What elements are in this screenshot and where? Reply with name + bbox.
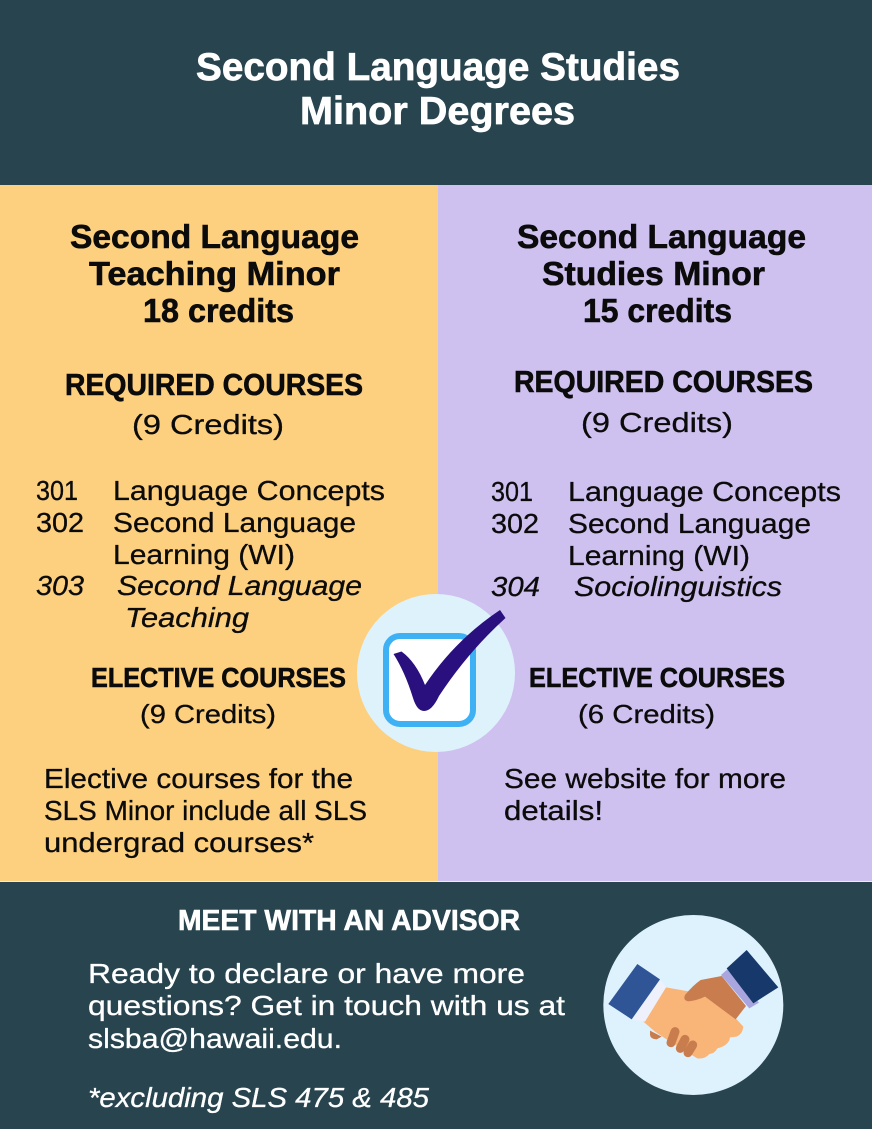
required courses heading: REQUIRED COURSES [65, 367, 363, 402]
elective courses note: details! [504, 795, 603, 826]
required courses heading [65, 367, 363, 440]
required course list: Language Concepts [113, 475, 385, 506]
required course list: 302 [491, 508, 539, 539]
required course list [36, 475, 385, 633]
required courses heading [514, 364, 813, 438]
title: Minor Degrees [300, 90, 575, 133]
required course list: 303 [36, 570, 84, 601]
required courses heading: (9 Credits) [581, 407, 733, 438]
elective courses heading [91, 662, 346, 729]
required courses heading: REQUIRED COURSES [514, 364, 813, 399]
advisor text [88, 958, 565, 1054]
advisor heading: MEET WITH AN ADVISOR [178, 905, 520, 937]
elective courses heading: (9 Credits) [140, 699, 276, 729]
required course list: Language Concepts [568, 476, 841, 507]
advisor text: Ready to declare or have more [88, 958, 525, 989]
footnote: *excluding SLS 475 & 485 [88, 1082, 429, 1113]
heading: studies minor [517, 218, 806, 329]
required course list: Teaching [125, 602, 249, 633]
elective courses note [44, 763, 367, 858]
heading: studies minor: 15 credits [583, 292, 732, 329]
required course list [491, 476, 841, 602]
elective courses heading [529, 662, 785, 729]
required course list: 302 [36, 507, 84, 538]
title [196, 46, 680, 133]
heading: studies minor: Second Language [517, 218, 806, 255]
advisor text: slsba@hawaii.edu. [88, 1023, 342, 1054]
header band [0, 0, 872, 185]
panel: Second Language Teaching Minor [0, 185, 438, 881]
required course list: Second Language [117, 570, 362, 601]
elective courses note: SLS Minor include all SLS [44, 795, 367, 826]
heading: teaching minor: 18 credits [143, 292, 294, 329]
footer band [0, 881, 872, 1129]
required course list: Second Language [113, 507, 356, 538]
required course list: Sociolinguistics [574, 571, 782, 602]
elective courses note [504, 763, 786, 826]
heading: studies minor: Studies Minor [542, 255, 765, 292]
required course list: 304 [491, 571, 540, 602]
icon: handshake [603, 915, 783, 1095]
required courses heading: (9 Credits) [132, 409, 284, 440]
required course list: Second Language [568, 508, 811, 539]
advisor text: questions? Get in touch with us at [88, 990, 565, 1021]
elective courses heading: ELECTIVE COURSES [91, 662, 346, 693]
heading: teaching minor: Second Language [70, 218, 359, 255]
title: Second Language Studies [196, 46, 680, 89]
required course list: 301 [36, 475, 78, 506]
required course list: Learning (WI) [568, 540, 750, 571]
icon: checkmark in box [357, 594, 515, 752]
elective courses note: See website for more [504, 763, 786, 794]
required course list: Learning (WI) [113, 539, 295, 570]
elective courses heading: (6 Credits) [578, 699, 715, 729]
required course list: 301 [491, 476, 533, 507]
heading: teaching minor [70, 218, 359, 329]
panel: Second Language Studies Minor [438, 185, 872, 881]
elective courses note: Elective courses for the [44, 763, 353, 794]
heading: teaching minor: Teaching Minor [89, 255, 340, 292]
elective courses note: undergrad courses* [44, 827, 314, 858]
elective courses heading: ELECTIVE COURSES [529, 662, 785, 693]
